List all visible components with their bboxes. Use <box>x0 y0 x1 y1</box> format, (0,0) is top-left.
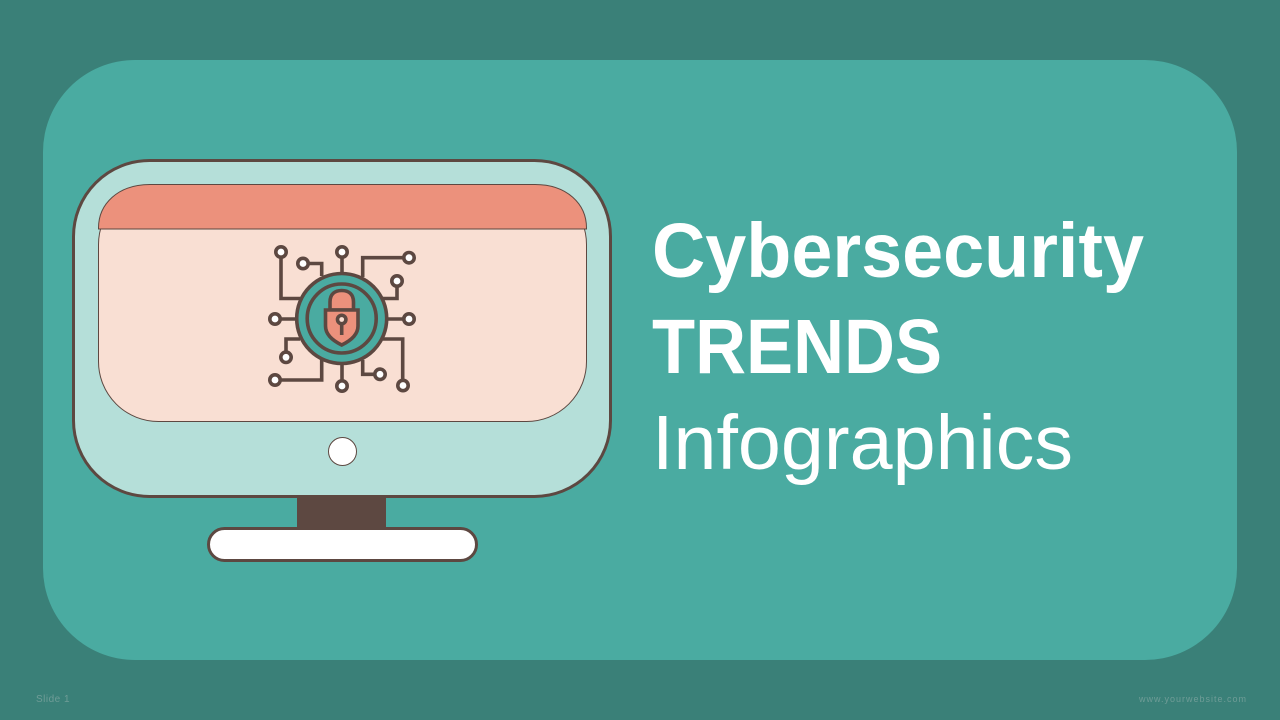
lock outer ring <box>297 274 387 364</box>
title text <box>652 208 1144 486</box>
screen header bar <box>98 184 586 229</box>
padlock keyhole <box>338 315 346 335</box>
monitor body <box>74 160 610 496</box>
monitor power button <box>328 438 356 466</box>
footer: website: www.yourwebsite.com <box>1138 694 1246 704</box>
title line: Infographics: Infographics <box>652 400 1073 486</box>
title line: Cybersecurity: Cybersecurity <box>652 208 1144 294</box>
padlock shackle <box>330 290 354 310</box>
icon: circuit padlock <box>270 247 414 391</box>
padlock body <box>326 310 358 345</box>
monitor stand neck <box>297 495 386 530</box>
circuit traces <box>280 257 404 381</box>
monitor screen <box>98 184 586 422</box>
lock inner ring <box>307 284 376 353</box>
circuit nodes <box>270 247 414 391</box>
monitor stand base <box>208 528 476 560</box>
footer: slide number: Slide 1 <box>36 694 70 705</box>
panel: main teal card <box>43 60 1237 660</box>
icon: computer monitor <box>74 160 610 560</box>
title line: TRENDS: TRENDS <box>652 304 942 390</box>
